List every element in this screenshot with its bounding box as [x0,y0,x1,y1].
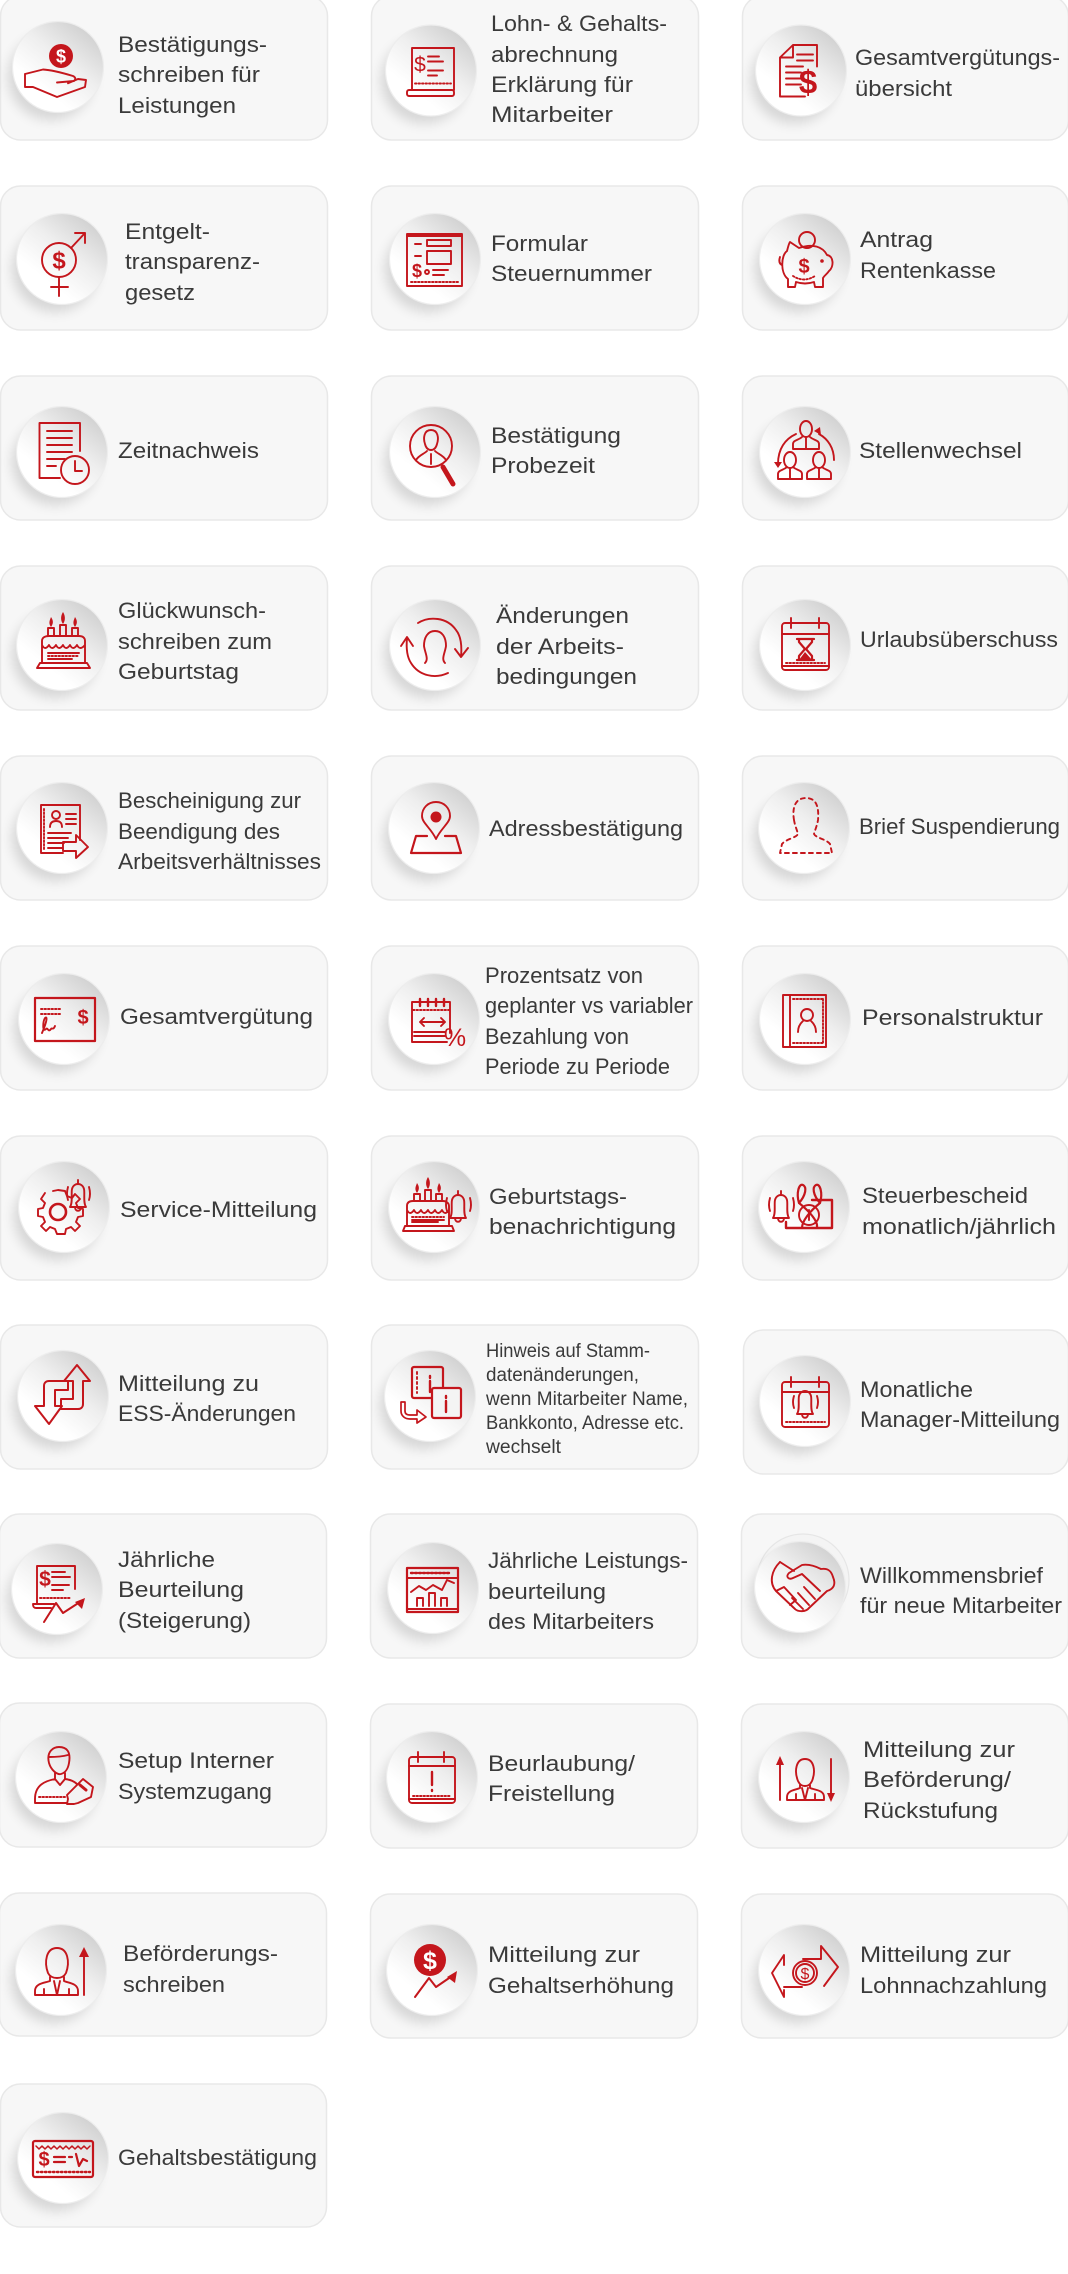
icon: calendar with percent: % [444,1024,466,1052]
card: Formular Steuernummer [372,186,698,330]
label: Beförderung/ [863,1767,1012,1792]
label: datenänderungen, [486,1365,639,1386]
label: Jährliche [118,1547,215,1572]
label [118,788,321,874]
label [491,231,653,286]
icon: hand with coin: $ [56,46,66,66]
label: Bestätigungs- [118,32,267,57]
label: Formular [491,231,589,256]
label: Steuerbescheid [862,1183,1028,1208]
card: Beförderungsschreiben [0,1893,326,2036]
icon: salary certificate: $ [38,2149,50,2171]
icon: birthday cake [12,600,108,698]
label: Arbeitsverhältnisses [118,849,321,874]
label: Änderungen [496,603,629,628]
label: Hinweis auf Stamm- [486,1341,650,1362]
label: Antrag [860,227,933,252]
label: gesetz [125,280,195,305]
label [118,1547,251,1633]
icon: exchange arrows with coin [754,1924,850,2023]
icon: report with rising arrow [7,1544,102,1642]
label: Rückstufung [863,1798,998,1823]
label [496,603,637,689]
icon: form: $ [412,261,422,281]
icon: three people rotating [755,406,850,505]
label: übersicht [855,76,953,101]
card: Personalstruktur [742,946,1068,1090]
icon: exchange arrows with coin: $ [801,1966,810,1983]
label: benachrichtigung [489,1214,676,1239]
label: Monatliche [860,1377,973,1402]
icon: map pin [384,782,480,881]
label: Service-Mitteilung [120,1197,317,1222]
label: (Steigerung) [118,1608,251,1633]
icon: information documents [380,1350,476,1449]
icon: gear with bell [14,1162,110,1260]
icon: salary certificate [13,2112,108,2211]
icon: up and down arrows [13,1350,108,1449]
card: Adressbestätigung [372,756,698,900]
card: Willkommensbrief für neue Mitarbeiter [742,1514,1068,1658]
label: Gehaltserhöhung [488,1973,674,1998]
label: schreiben für [118,62,261,87]
label [118,1371,296,1426]
icon: piggy bank: $ [798,256,810,278]
label: Setup Interner [118,1748,275,1773]
label [488,1942,674,1998]
label: schreiben [123,1972,225,1997]
label: Geburtstags- [489,1184,627,1209]
label: Mitteilung zur [860,1942,1012,1967]
label: Rentenkasse [860,258,996,283]
card: Gehaltsbestätigung [0,2084,326,2227]
card: Bestätigung Probezeit [372,376,698,520]
card: Glückwunschschreiben zum Geburtstag [0,566,328,710]
label: Jährliche Leistungs- [488,1548,688,1573]
label [860,1563,1063,1618]
icon: gender symbol with dollar [12,214,108,312]
card: Zeitnachweis [0,376,328,520]
card: Setup Interner Systemzugang [0,1703,326,1847]
card: Brief Suspendierung [742,756,1068,900]
icon: calendar with hourglass [755,600,850,698]
label: Geburtstag [118,659,239,684]
label: Lohnnachzahlung [860,1973,1047,1998]
label: Adressbestätigung [489,816,683,841]
icon: cheque [14,974,110,1072]
icon: person with key [11,1732,106,1830]
label: monatlich/jährlich [862,1214,1056,1239]
icon: certificate with arrow [12,782,108,881]
card: Änderungen der Arbeitsbedingungen [372,566,698,710]
label: Gehaltsbestätigung [118,2145,317,2170]
label [855,45,1060,101]
label: Manager-Mitteilung [860,1407,1060,1432]
label: Mitteilung zur [488,1942,641,1967]
label: Systemzugang [118,1779,272,1804]
label: Glückwunsch- [118,598,266,623]
label: Bescheinigung zur [118,788,301,813]
card: Mitteilung zur Lohnnachzahlung [742,1894,1068,2038]
card: Beurlaubung/Freistellung [370,1704,698,1848]
icon: person with up and down arrows [754,1732,850,1830]
card: Jährliche Leistungsbeurteilung des Mitarbeiters [370,1514,698,1658]
label: Beförderungs- [123,1941,278,1966]
label: Urlaubsüberschuss [860,627,1058,652]
label: Bankkonto, Adresse etc. [486,1413,684,1434]
label: Beendigung des [118,819,280,844]
card: Stellenwechsel [742,376,1068,520]
icon: time sheet with clock [12,406,108,505]
icon: personnel book [755,974,850,1072]
label: Steuernummer [491,261,653,286]
label: abrechnung [491,42,618,67]
label: Personalstruktur [862,1005,1044,1030]
card: Service-Mitteilung [0,1136,328,1280]
label [488,1548,688,1634]
icon: magnifier with person [385,406,480,505]
label: Brief Suspendierung [859,814,1060,839]
card: Urlaubsüberschuss [742,566,1068,710]
label [862,1183,1056,1239]
icon: form [385,214,480,312]
label: Freistellung [488,1781,615,1806]
card: Bescheinigung zur Beendigung [0,756,328,900]
label [488,1751,636,1806]
label: Zeitnachweis [118,438,259,463]
label: geplanter vs variabler [485,993,693,1018]
icon: payslip [381,25,476,124]
label [860,1942,1047,1998]
label [489,1184,676,1239]
label [860,227,996,283]
card: Steuerbescheid monatlich/jährlich [742,1136,1068,1280]
label: Willkommensbrief [860,1563,1044,1588]
icon: chart window [383,1542,478,1641]
card: Lohn- und Gehaltsabrechnung [372,0,698,140]
icon: coin with rising arrow [382,1924,478,2023]
icon: hand with coin [8,22,104,120]
label: Stellenwechsel [859,438,1022,463]
icon: cake with bell [384,1162,480,1260]
label [118,598,272,684]
card: Bestätigungsschreiben für Leistungen [0,0,328,140]
label: Beurlaubung/ [488,1751,636,1776]
label: Mitteilung zu [118,1371,259,1396]
label: bedingungen [496,664,637,689]
icon: calendar with exclamation mark [382,1732,478,1830]
card: Hinweis auf Stammdatenänderungen [372,1325,698,1469]
label: Mitarbeiter [491,102,614,127]
label: Periode zu Periode [485,1054,670,1079]
card: Jährliche Beurteilung (Steigerung) [0,1514,326,1658]
label [491,423,621,478]
label [485,1341,688,1458]
icon: dashed person [754,782,850,881]
card: Mitteilung zur Beförderung/Rückstufung [742,1704,1068,1848]
label: Bestätigung [491,423,621,448]
label: ESS-Änderungen [118,1401,296,1426]
label: transparenz- [125,249,260,274]
label [860,1377,1060,1432]
label: Bezahlung von [485,1024,629,1049]
label: Gesamtvergütung [120,1004,313,1029]
label: Erklärung für [491,72,634,97]
card: Prozentsatz geplanter vs variabler Bezahlung [372,946,698,1090]
label: Probezeit [491,453,596,478]
icon: gender symbol with dollar: $ [52,248,66,274]
label: für neue Mitarbeiter [860,1593,1063,1618]
icon: coin with rising arrow: $ [423,1947,437,1975]
icon: piggy bank [755,214,850,312]
icon: cheque: $ [77,1007,89,1029]
icon: report with rising arrow: $ [39,1568,51,1591]
label: Prozentsatz von [485,963,643,988]
icon: person with up arrow [11,1924,106,2023]
label [485,963,693,1079]
label [123,1941,278,1997]
label: des Mitarbeiters [488,1609,654,1634]
label: Mitteilung zur [863,1737,1016,1762]
card: Entgelttransparenzgesetz [0,186,328,330]
card: Mitteilung zur Gehaltserhöhung [370,1894,698,2038]
label: wenn Mitarbeiter Name, [485,1389,688,1410]
icon: handshake [750,1542,846,1640]
label: beurteilung [488,1579,606,1604]
label: Entgelt- [125,219,210,244]
label [863,1737,1016,1823]
label: Leistungen [118,93,236,118]
card: Gesamtvergütungsübersicht [742,0,1068,140]
label [118,32,267,118]
icon: calendar with percent [384,974,480,1072]
icon: head with circular arrows [385,600,480,698]
icon: payslip: $ [414,54,426,76]
label: Beurteilung [118,1577,244,1602]
label: Gesamtvergütungs- [855,45,1060,70]
icon: calendar with bell [755,1356,850,1454]
label [491,11,667,127]
label: Lohn- & Gehalts- [491,11,667,36]
plate ghost [757,1534,849,1626]
label [118,1748,275,1804]
card: Gesamtvergütung [0,946,328,1090]
icon: document with dollar [751,25,846,124]
card: Antrag Rentenkasse [742,186,1068,330]
card: Geburtstagsbenachrichtigung [372,1136,698,1280]
icon: document with dollar: $ [799,64,817,100]
icon: banknote with scissors and bell [754,1162,850,1260]
label: wechselt [485,1437,562,1458]
card: Monatliche Manager-Mitteilung [744,1330,1068,1474]
label: schreiben zum [118,629,272,654]
card: Mitteilung zu ESS-Änderungen [0,1325,328,1469]
label [125,219,260,305]
label: der Arbeits- [496,634,624,659]
